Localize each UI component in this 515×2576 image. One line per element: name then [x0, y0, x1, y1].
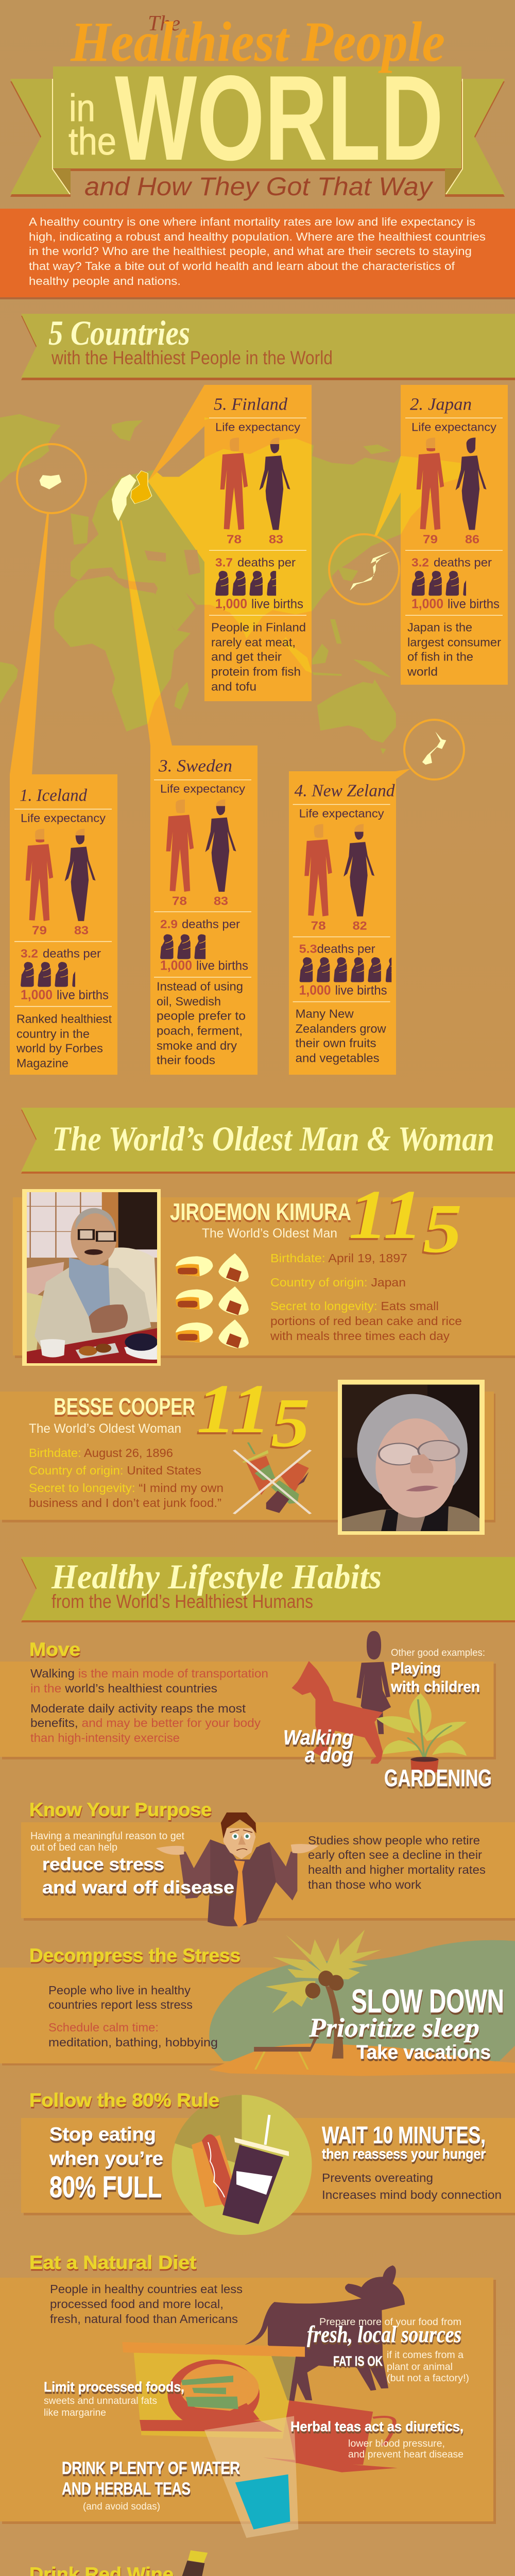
photo frame: Jiroemon Kimura	[22, 1189, 161, 1366]
country name: 5. Finland	[214, 395, 288, 414]
callout: fat is ok	[333, 2350, 469, 2384]
fact text: Magazine	[16, 1056, 68, 1070]
fact text: their own fruits	[296, 1036, 376, 1049]
panel: new zealand: 78	[311, 919, 326, 932]
icon: finland	[131, 471, 152, 504]
fact text: oil, Swedish	[157, 995, 221, 1008]
body text right: health and higher mortality rates	[308, 1863, 486, 1876]
panel: sweden: 1,000	[160, 958, 192, 973]
fact text: of fish in the	[407, 650, 473, 663]
habit: eat a natural diet	[0, 2252, 496, 2538]
callout: stop eating: 80% FULL	[49, 2171, 162, 2204]
name: Besse Cooper: BESSE COOPER	[54, 1393, 195, 1420]
intro text: in the world? Who are the healthiest people, and what are their secrets to staying	[29, 245, 472, 258]
panel: iceland: live births	[57, 988, 109, 1003]
callout: fresh local sources: Prepare more of your food from	[319, 2317, 461, 2328]
panel: japan: deaths per	[434, 555, 492, 569]
panel: iceland: deaths per	[43, 947, 101, 960]
fact text: Japan is the	[407, 620, 472, 634]
callout: fat is ok: FAT IS OK	[333, 2353, 383, 2369]
panel: iceland: 79	[32, 923, 47, 937]
photo: Besse Cooper	[342, 1385, 480, 1531]
caption: oldest woman: The World’s Oldest Woman	[29, 1421, 181, 1436]
panel: oldest woman	[0, 1370, 495, 1535]
panel	[0, 2278, 496, 2524]
bio text: Cooper: Country of origin: United States	[29, 1464, 201, 1477]
callout: fat is ok: plant or animal	[387, 2362, 453, 2372]
body text: meditation, bathing, hobbying	[48, 2036, 218, 2049]
panel: sweden: 83	[214, 894, 228, 908]
life expectancy figures	[166, 800, 236, 892]
panel: finland: 3.7	[215, 555, 233, 569]
callout: drink water: (and avoid sodas)	[83, 2501, 160, 2512]
body text: benefits, and may be better for your body	[30, 1716, 261, 1730]
fact text	[16, 1012, 112, 1070]
illustration: beach and palm tree	[209, 1929, 515, 2076]
world map	[0, 414, 476, 754]
infant mortality icons	[21, 962, 75, 987]
panel: finland	[209, 395, 306, 693]
callout: playing with children: with children	[390, 1679, 480, 1696]
section banner: oldest man and woman	[21, 1108, 515, 1174]
icon: no junk food	[234, 1443, 311, 1514]
illustration: plate with hot dog and soda	[172, 2095, 312, 2235]
callout: drink water	[62, 2459, 240, 2512]
callout: prioritize sleep: Prioritize sleep	[308, 2013, 479, 2043]
photo: Jiroemon Kimura	[27, 1192, 158, 1364]
body text right: early often see a decline in their	[308, 1848, 482, 1861]
callout: other good examples: Other good examples:	[391, 1648, 485, 1658]
infant mortality icons	[215, 571, 280, 596]
body text: People in healthy countries eat less	[50, 2282, 243, 2296]
habit: drink red wine	[21, 2550, 515, 2576]
callout: walking a dog: Walking	[283, 1726, 353, 1749]
panel	[0, 1662, 496, 1759]
fact text: People in Finland	[211, 620, 306, 634]
fact text: smoke and dry	[157, 1039, 237, 1053]
age 115: 5	[271, 1384, 310, 1462]
bio text: Kimura	[270, 1251, 462, 1343]
title: Healthiest People: Healthiest People	[70, 10, 445, 73]
callout: drink water: DRINK PLENTY OF WATER	[62, 2459, 240, 2478]
callout: drink water: AND HERBAL TEAS	[62, 2479, 191, 2499]
panel: new zealand: live births	[335, 983, 387, 997]
heading: Know Your Purpose	[29, 1799, 212, 1820]
body text left: out of bed can help	[30, 1842, 117, 1853]
habit: move	[0, 1631, 496, 1791]
body text left: Having a meaningful reason to get	[30, 1831, 184, 1842]
callout: playing with children	[390, 1660, 480, 1696]
map highlight circles	[17, 444, 464, 779]
callout: walking a dog: a dog	[305, 1744, 353, 1767]
icon: woman walking a dog and plant	[292, 1631, 467, 1772]
fact text: largest consumer	[407, 635, 501, 649]
panel: finland: deaths per	[237, 555, 296, 569]
callout: fresh local sources: fresh, local sources	[307, 2321, 461, 2347]
panel: finland: live births	[251, 597, 303, 611]
fact text: Instead of using	[157, 980, 243, 993]
fact text: and vegetables	[296, 1051, 380, 1064]
fact text	[211, 620, 306, 693]
callout: stop eating: Stop eating	[49, 2124, 156, 2145]
heading: Eat a Natural Diet	[29, 2252, 196, 2273]
body text	[50, 2282, 243, 2326]
panel: iceland	[14, 786, 112, 1070]
callout: fat is ok: (but not a factory!)	[387, 2373, 469, 2384]
heading: Move	[29, 1639, 80, 1660]
panel: sweden: deaths per	[182, 918, 240, 931]
bio text: Cooper	[29, 1446, 224, 1510]
callout beams	[10, 385, 410, 779]
title header	[10, 10, 505, 201]
intro text: healthy people and nations.	[29, 275, 181, 287]
fact text: rarely eat meat,	[211, 635, 296, 649]
banner subtitle: from the World’s Healthiest Humans	[52, 1591, 313, 1612]
body text: Increases mind body connection	[322, 2188, 502, 2201]
banner title: Healthy Lifestyle Habits	[51, 1557, 382, 1596]
habit: follow the 80% rule	[21, 2090, 515, 2235]
bio text: Kimura: with meals three times each day	[270, 1329, 450, 1343]
panel: oldest man	[13, 1176, 515, 1366]
life expectancy figures	[417, 437, 487, 530]
panel: iceland: Life expectancy	[21, 812, 106, 824]
title: the: the	[68, 120, 116, 163]
icon: sweden and norway	[112, 474, 136, 521]
bio text: Cooper: business and I don’t eat junk food.”	[29, 1496, 221, 1510]
callout: limit processed foods: Limit processed foods,	[44, 2379, 184, 2395]
callout: reduce stress	[42, 1855, 234, 1897]
fact text: Ranked healthiest	[16, 1012, 112, 1025]
illustration: cow and food	[122, 2265, 405, 2538]
infant mortality icons	[411, 571, 466, 596]
panel	[21, 1822, 515, 1921]
life expectancy figures	[26, 829, 96, 921]
fact text: poach, ferment,	[157, 1024, 243, 1038]
panel: sweden: live births	[196, 959, 248, 973]
heading: Decompress the Stress	[29, 1945, 241, 1966]
panel: finland: 83	[269, 532, 283, 546]
fact text: Many New	[296, 1007, 354, 1020]
panel: sweden: Life expectancy	[160, 783, 245, 795]
intro text: A healthy country is one where infant mortality rates are low and life expectancy is	[29, 215, 475, 228]
country name: 3. Sweden	[158, 757, 232, 776]
body text: processed food and more local,	[50, 2297, 224, 2311]
callout: wait 10 minutes	[322, 2122, 486, 2162]
section banner: healthy lifestyle habits	[21, 1557, 515, 1622]
panel	[0, 1968, 496, 2065]
fact text	[407, 620, 501, 678]
title: The: The	[148, 12, 180, 36]
callout: fat is ok: if it comes from a	[387, 2350, 464, 2361]
body text: Moderate daily activity reaps the most	[30, 1702, 246, 1715]
panel: japan	[405, 395, 503, 678]
callout: limit processed foods: sweets and unnatural fats	[44, 2396, 157, 2406]
icon: japan	[350, 551, 391, 590]
age 115: 11	[197, 1370, 271, 1448]
age 115: 11	[349, 1176, 423, 1253]
name: Jiroemon Kimura: JIROEMON KIMURA	[170, 1198, 351, 1225]
fact text: and tofu	[211, 680, 256, 693]
body text: Schedule calm time:	[48, 2021, 159, 2034]
callout: stop eating: when you’re	[49, 2148, 163, 2169]
icons: red bean cake and rice	[176, 1253, 249, 1348]
body text: Walking is the main mode of transportation	[30, 1667, 268, 1680]
panel: japan: 86	[465, 532, 479, 546]
title: in: in	[69, 87, 95, 129]
panel: new zealand: 82	[353, 919, 367, 932]
fact text: their foods	[157, 1054, 215, 1067]
body text: in the world’s healthiest countries	[30, 1682, 217, 1695]
bio text: Kimura: portions of red bean cake and rice	[270, 1314, 462, 1328]
infant mortality icons	[160, 934, 208, 959]
body text: Prevents overeating	[322, 2171, 433, 2184]
panel: japan: Life expectancy	[411, 420, 496, 433]
icon: new zealand	[422, 732, 446, 765]
callout: wait 10 minutes: then reassess your hunger	[322, 2146, 486, 2162]
bio text: Cooper: Secret to longevity: “I mind my own	[29, 1481, 224, 1495]
icon: iceland	[40, 474, 61, 489]
country name: 4. New Zeland	[295, 781, 396, 800]
banner subtitle: with the Healthiest People in the World	[51, 347, 333, 368]
bio text: Cooper: Birthdate: August 26, 1896	[29, 1446, 173, 1460]
habit: decompress the stress	[0, 1929, 515, 2076]
country panels background	[10, 385, 508, 1075]
country name: 1. Iceland	[20, 786, 88, 805]
age 115: 5	[423, 1190, 462, 1267]
intro text: that way? Take a bite out of world health and learn about the characteristics of	[29, 260, 455, 273]
life expectancy figures	[304, 824, 374, 917]
heading: Follow the 80% Rule	[29, 2090, 219, 2111]
caption: oldest man: The World’s Oldest Man	[202, 1226, 337, 1241]
title ribbon	[10, 66, 505, 197]
map seen through panels	[121, 417, 465, 724]
panel: finland: 1,000	[215, 596, 247, 611]
body text	[48, 1984, 218, 2049]
fact text: protein from fish	[211, 665, 301, 678]
bio text: Kimura: Birthdate: April 19, 1897	[270, 1251, 407, 1265]
callout: limit processed foods	[44, 2379, 184, 2418]
life expectancy figures	[220, 437, 290, 530]
panel: finland: Life expectancy	[215, 420, 300, 433]
panel: japan: 3.2	[411, 555, 429, 569]
panel: iceland: 83	[74, 923, 89, 937]
bio text: Kimura: Country of origin: Japan	[270, 1276, 406, 1289]
fact text: people prefer to	[157, 1009, 246, 1023]
intro band	[0, 209, 515, 299]
body text: than high-intensity exercise	[30, 1731, 180, 1744]
fact text	[157, 980, 246, 1067]
panel: japan: 79	[423, 532, 438, 546]
body text	[30, 1667, 268, 1744]
panel: new zealand: 5.3	[299, 942, 317, 955]
callout: walking a dog	[283, 1726, 353, 1767]
panel: japan: live births	[448, 597, 500, 611]
fact text: and get their	[211, 650, 282, 663]
bio text: Kimura: Secret to longevity: Eats small	[270, 1299, 439, 1313]
body text right	[308, 1834, 486, 1891]
body text: People who live in healthy	[48, 1984, 191, 1997]
fact text: world by Forbes	[16, 1042, 103, 1055]
subtitle: and How They Got That Way	[84, 172, 434, 201]
callout: herbal teas: Herbal teas act as diuretics,	[290, 2419, 464, 2434]
fact text	[296, 1007, 386, 1064]
habit: know your purpose	[21, 1799, 515, 1928]
illustration: wine bottle and glass	[91, 2550, 211, 2576]
illustration: shrugging man	[156, 1812, 319, 1928]
callout: reduce stress: reduce stress	[42, 1855, 164, 1874]
panel: iceland: 3.2	[21, 947, 38, 960]
infant mortality icons	[300, 957, 399, 982]
callout: limit processed foods: like margarine	[44, 2408, 106, 2418]
callout: herbal teas: and prevent heart disease	[348, 2449, 464, 2460]
body text: countries report less stress	[48, 1998, 193, 2011]
photo frame: Besse Cooper	[338, 1380, 485, 1535]
panel: japan: 1,000	[411, 596, 443, 611]
body text right: Studies show people who retire	[308, 1834, 480, 1847]
callout: take vacations: Take vacations	[356, 2042, 491, 2063]
country name: 2. Japan	[410, 395, 472, 414]
panel: sweden	[154, 757, 251, 1067]
body text left	[30, 1831, 184, 1853]
callout: playing with children: Playing	[391, 1660, 441, 1677]
fact text: country in the	[16, 1027, 90, 1041]
section banner: 5 countries	[21, 313, 515, 380]
intro text	[29, 215, 486, 287]
body text	[322, 2171, 502, 2201]
panel: new zealand	[293, 781, 399, 1064]
panel: finland: 78	[227, 532, 242, 546]
panel	[21, 2118, 515, 2215]
callout: reduce stress: and ward off disease	[42, 1878, 234, 1897]
callout: herbal teas	[290, 2419, 464, 2460]
panel: sweden: 2.9	[160, 918, 178, 931]
body text: fresh, natural food than Americans	[50, 2312, 238, 2326]
panel: new zealand: 1,000	[299, 982, 331, 997]
panel: sweden: 78	[172, 894, 187, 908]
panel: iceland: 1,000	[21, 987, 53, 1003]
panel: new zealand: deaths per	[317, 942, 375, 955]
panel: new zealand: Life expectancy	[299, 807, 384, 820]
callout: herbal teas: lower blood pressure,	[348, 2438, 445, 2449]
fact text: world	[407, 665, 438, 678]
callout: stop eating	[49, 2124, 163, 2204]
fact text: Zealanders grow	[296, 1022, 386, 1035]
body text right: than those who work	[308, 1878, 422, 1891]
intro text: high, indicating a robust and healthy population. Where are the healthiest countries	[29, 230, 486, 243]
banner title: 5 Countries	[48, 313, 190, 352]
